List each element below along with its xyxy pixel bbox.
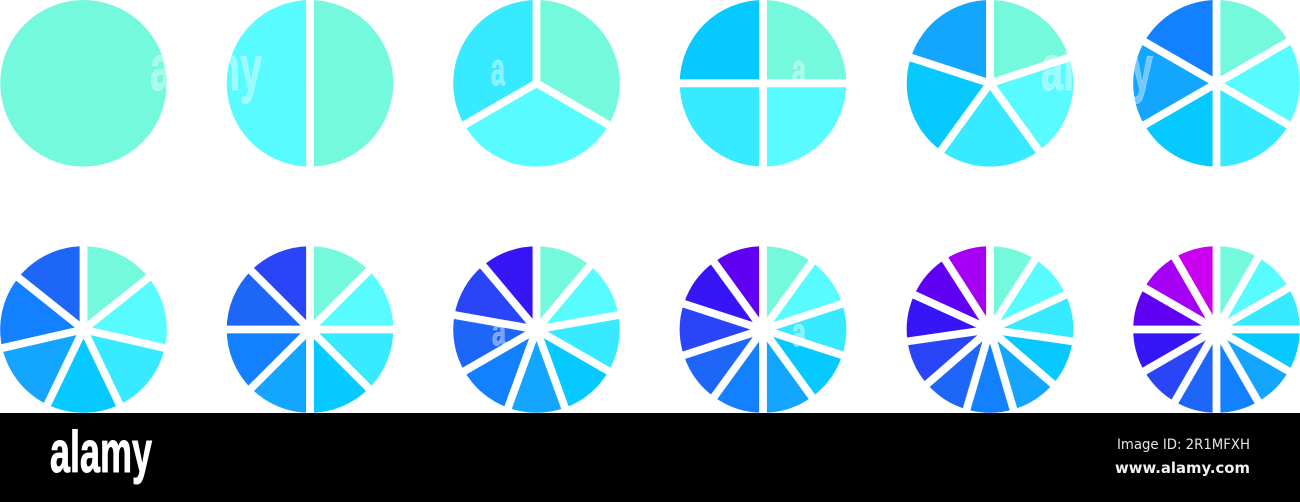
footer logo: alamy	[50, 420, 152, 485]
pie: 6 slices	[1108, 0, 1300, 187]
pie: 10 slices	[669, 233, 857, 426]
website: www.alamy.com	[1115, 459, 1250, 477]
watermark: alamy right: alamy	[1041, 32, 1153, 104]
footer banner	[0, 413, 1300, 502]
watermark: a on pie 4: a	[792, 44, 806, 96]
watermark: alamy left: alamy	[150, 32, 262, 104]
pie: 8 slices	[209, 229, 411, 430]
image id: Image ID: 2R1MFXH	[1117, 437, 1250, 453]
pie: 7 slices	[0, 227, 189, 433]
pie: 9 slices	[438, 231, 631, 426]
pie: 4 slices	[673, 0, 853, 173]
pie: 2 slices	[227, 0, 393, 173]
watermark: a on pie 10: a	[792, 311, 806, 355]
pie: 5 slices	[877, 0, 1094, 197]
pie: 3 slices	[423, 0, 620, 197]
pie: 12 slices	[1124, 237, 1300, 422]
watermark: a on pie 3: a	[491, 43, 505, 95]
watermark: a on pie 9: a	[492, 310, 506, 354]
pie: 11 slices	[898, 235, 1084, 422]
pie: whole circle	[0, 0, 167, 167]
